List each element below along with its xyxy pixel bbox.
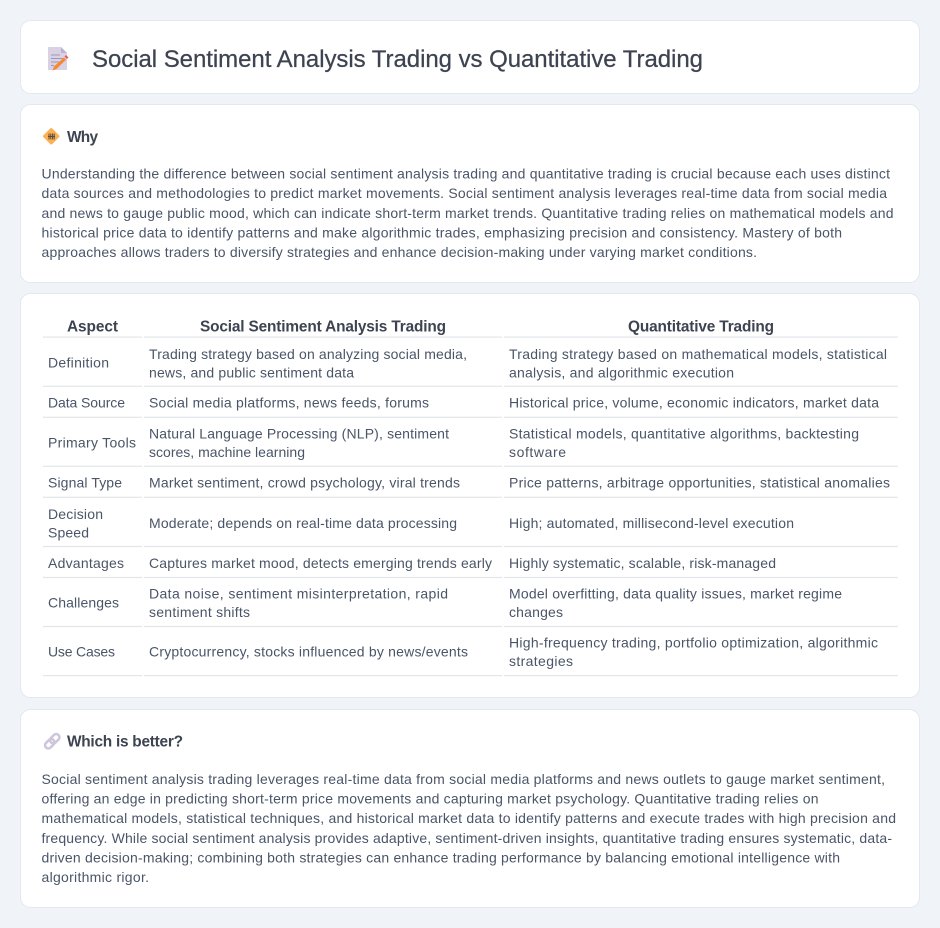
icon: road sign diamond	[42, 127, 60, 145]
heading: why: Why	[67, 129, 98, 146]
row: advantages: Captures market mood, detects emerging trends early	[149, 555, 492, 571]
row: challenges: Data noise, sentiment misinterpretation, rapid	[149, 586, 448, 602]
row: definition: Trading strategy based on mathematical models, statistical	[509, 346, 887, 362]
row: definition: news, and public sentiment data	[149, 364, 354, 380]
heading: which is better: Which is better?	[67, 734, 183, 751]
row: signal type: Market sentiment, crowd psychology, viral trends	[149, 475, 460, 491]
row: use cases: strategies	[509, 653, 573, 669]
row: primary tools: Natural Language Processing (NLP), sentiment	[149, 426, 449, 442]
row: primary tools: Statistical models, quantitative algorithms, backtesting	[509, 426, 859, 442]
row: primary tools: scores, machine learning	[149, 444, 305, 460]
text block: which is better: offering an edge in predicting short-term price movements and capturing market psychology. Quantitative trading relies on	[42, 791, 818, 807]
row: primary tools	[48, 426, 859, 460]
text block: why: historical price data to identify patterns and make algorithmic trades, emphasizing precision and consistency. Mastery of both	[42, 224, 842, 240]
table header row	[67, 319, 774, 336]
panel: why	[20, 104, 920, 282]
row: definition: analysis, and algorithmic execution	[509, 364, 734, 380]
text block: why: Understanding the difference between social sentiment analysis trading and quantitative trading is crucial because each uses distinct	[42, 166, 890, 182]
row: decision speed: Speed	[48, 524, 89, 540]
row: decision speed: Decision	[48, 506, 103, 522]
row: use cases	[48, 634, 878, 669]
row: challenges: Model overfitting, data quality issues, market regime	[509, 586, 842, 602]
row: use cases: High-frequency trading, portfolio optimization, algorithmic	[509, 634, 878, 650]
text block: which is better: algorithmic rigor.	[42, 869, 149, 885]
row: definition: Trading strategy based on analyzing social media,	[149, 346, 467, 362]
row: challenges: sentiment shifts	[149, 604, 250, 620]
panel: which is better	[20, 710, 920, 908]
row: signal type: Price patterns, arbitrage opportunities, statistical anomalies	[509, 475, 890, 491]
row: signal type: Signal Type	[48, 475, 122, 491]
row: challenges: Challenges	[48, 594, 119, 610]
panel: title header	[20, 20, 920, 94]
table header row: Social Sentiment Analysis Trading	[200, 319, 446, 336]
table header row: Quantitative Trading	[628, 319, 774, 336]
row: definition: Definition	[48, 355, 109, 371]
row: primary tools: Primary Tools	[48, 435, 136, 451]
row: signal type	[48, 475, 890, 491]
row: definition	[48, 346, 887, 380]
row: use cases: Cryptocurrency, stocks influenced by news/events	[149, 644, 468, 660]
row: decision speed	[48, 506, 794, 540]
row: data source: Data Source	[48, 395, 125, 411]
row: challenges: changes	[509, 604, 563, 620]
row: use cases: Use Cases	[48, 644, 115, 660]
title: Social Sentiment Analysis Trading vs Quantitative Trading	[92, 46, 703, 73]
text block: why: approaches allows traders to diversify strategies and enhance decision-making under varying market conditions.	[42, 244, 757, 260]
row: advantages: Advantages	[48, 555, 124, 571]
text block: why: and news to gauge public mood, which can indicate short-term market trends. Quantitative trading relies on mathematical models and	[42, 205, 894, 221]
icon: link	[44, 733, 61, 750]
text block: which is better: driven decision-making; combining both strategies can enhance trading performance by balancing emotional intelligence with	[42, 850, 840, 866]
text block: why: data sources and methodologies to predict market movements. Social sentiment analysis leverages real-time data from social media	[42, 185, 887, 201]
text block: which is better: Social sentiment analysis trading leverages real-time data from social media platforms and news outlets to gauge market sentiment,	[42, 771, 885, 787]
row: decision speed: Moderate; depends on real-time data processing	[149, 515, 457, 531]
text block: why	[42, 166, 894, 260]
text block: which is better: frequency. While social sentiment analysis provides adaptive, sentiment-driven insights, quantitative trading ensures systematic, data-	[42, 830, 892, 846]
panel: comparison table	[20, 294, 920, 698]
icon: document with pencil	[48, 47, 68, 70]
row: data source: Historical price, volume, economic indicators, market data	[509, 395, 879, 411]
text block: which is better	[42, 771, 896, 885]
row: decision speed: High; automated, millisecond-level execution	[509, 515, 794, 531]
row: advantages: Highly systematic, scalable, risk-managed	[509, 555, 776, 571]
row: challenges	[48, 586, 842, 620]
row: data source	[48, 395, 879, 411]
row: primary tools: software	[509, 444, 566, 460]
row: advantages	[48, 555, 776, 571]
row: data source: Social media platforms, news feeds, forums	[149, 395, 429, 411]
table header row: Aspect	[67, 319, 118, 336]
text block: which is better: mathematical models, statistical techniques, and historical market data to identify patterns and execute trades with high precision and	[42, 810, 896, 826]
